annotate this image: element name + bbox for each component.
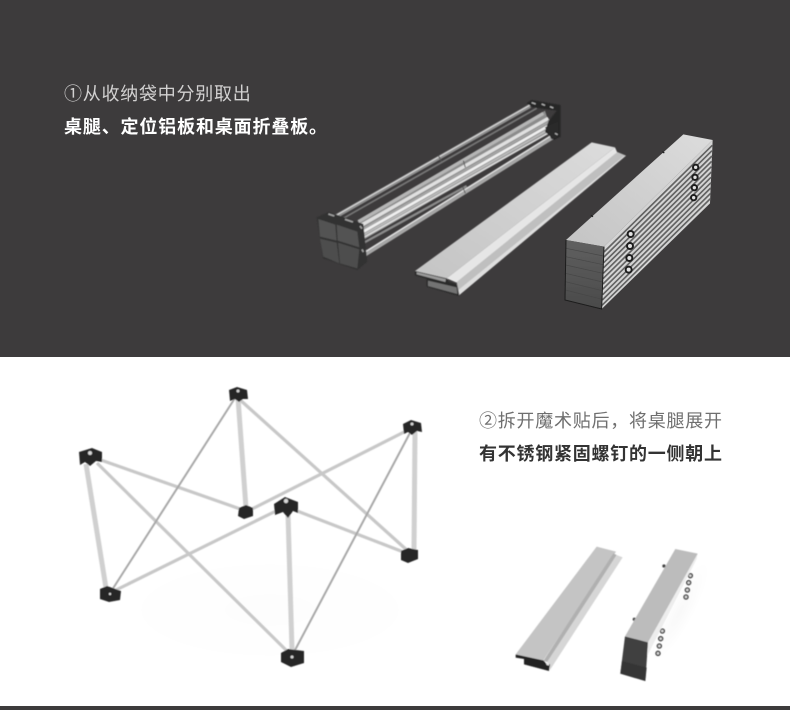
rods: [86, 398, 415, 654]
image: aluminium rail: [415, 142, 626, 296]
heading: step 1: ①从收纳袋中分别取出: [64, 84, 252, 104]
floor shadows: [100, 550, 440, 670]
text: step 2 bold: 有不锈钢紧固螺钉的一侧朝上: [479, 444, 723, 464]
image: small rail: [516, 547, 623, 671]
dark bottom strip: [0, 706, 790, 710]
image: stacked table boards: [565, 134, 713, 309]
bottom corner connectors: [317, 212, 367, 270]
heading: step 2: ②拆开魔术贴后，将桌腿展开: [479, 411, 723, 431]
image: unfolded table legs frame: [79, 387, 440, 670]
bolts: [626, 165, 698, 273]
top corner connectors: [527, 100, 561, 140]
rod bundle backing: [359, 111, 552, 240]
text: step 1 bold: 桌腿、定位铝板和桌面折叠板。: [64, 117, 328, 137]
image: small board stack: [620, 549, 718, 681]
image: folded table legs: [317, 100, 561, 270]
panel: dark top background: [0, 0, 790, 357]
corner connectors: [79, 387, 422, 667]
